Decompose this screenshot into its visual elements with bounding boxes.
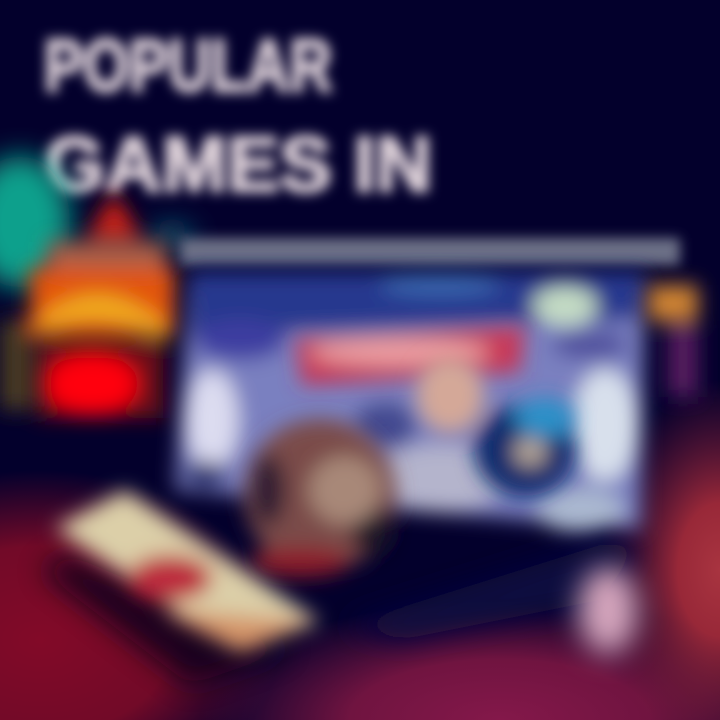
card shadow [40, 555, 290, 685]
icon: red and yellow lantern tower [0, 192, 175, 418]
box characters [244, 357, 575, 577]
icon: small orange token [648, 285, 698, 397]
box artwork [175, 272, 645, 532]
title: POPULAR [44, 24, 332, 107]
glowing white piece [578, 566, 638, 654]
box logo [295, 326, 525, 385]
box shadow [345, 545, 640, 640]
box lid edge [180, 238, 680, 265]
icon: teal tree [0, 156, 194, 288]
game card [55, 490, 320, 652]
floor glow [0, 380, 720, 720]
title: GAMES IN [44, 120, 432, 208]
game box [175, 238, 680, 577]
title [44, 24, 432, 208]
